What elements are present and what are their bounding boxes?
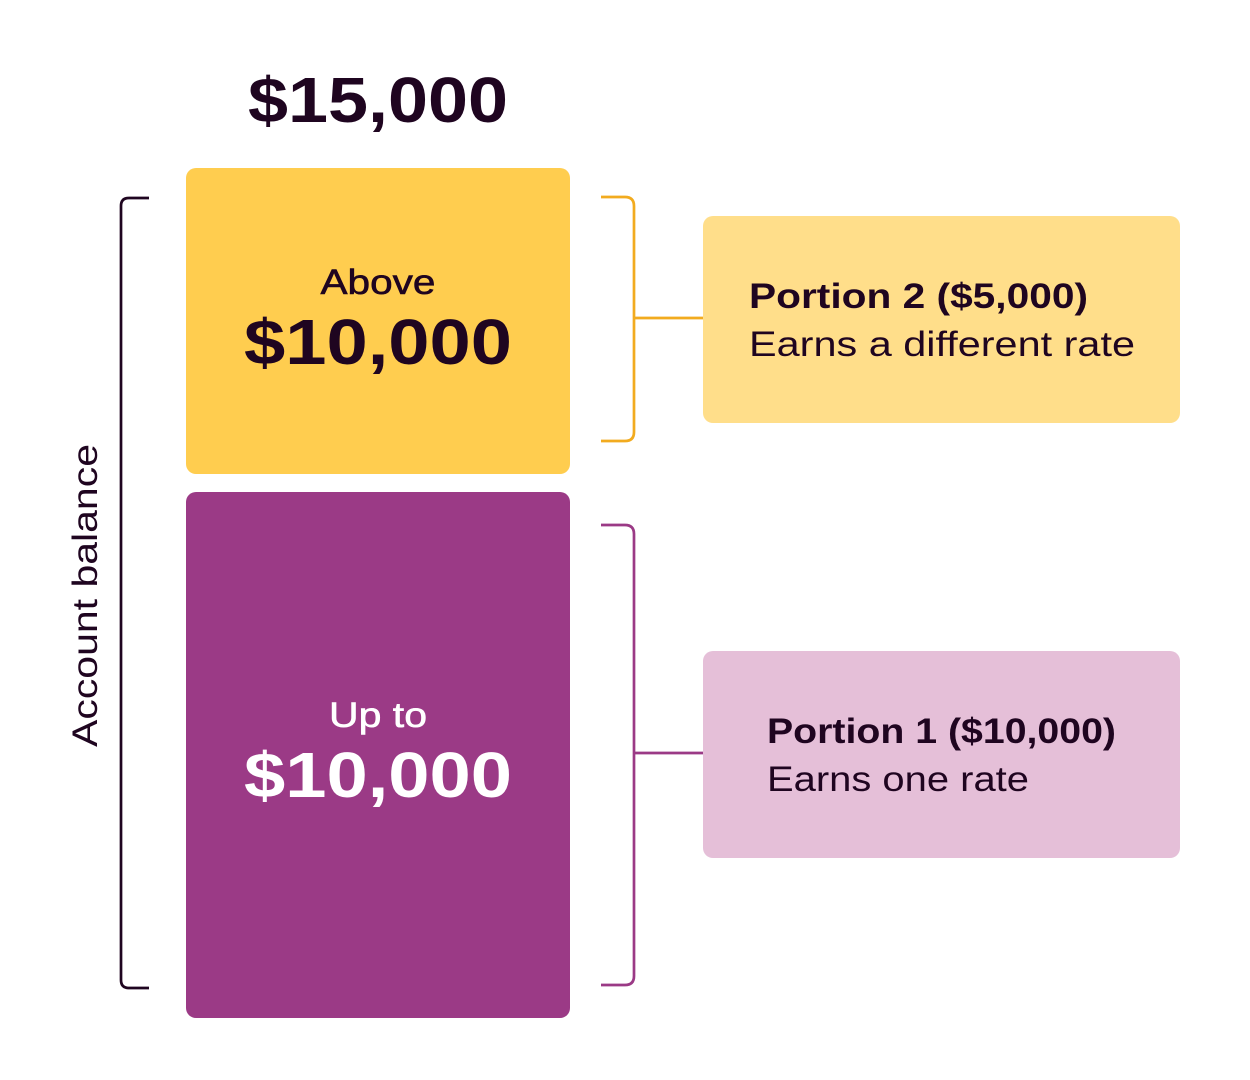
left bracket: account balance xyxy=(121,198,149,988)
callout text: portion 2: Earns a different rate xyxy=(749,325,1135,364)
callout text: portion 1: Earns one rate xyxy=(767,760,1029,799)
callout heading: portion 1: Portion 1 ($10,000) xyxy=(767,712,1116,751)
vertical label: account balance: Account balance xyxy=(66,444,105,747)
amount: above 10,000: $10,000 xyxy=(244,306,512,378)
panel: above 10,000 xyxy=(186,168,570,474)
callout: portion 2 xyxy=(703,216,1180,423)
amount: up to 10,000: $10,000 xyxy=(244,739,512,811)
callout heading: portion 2: Portion 2 ($5,000) xyxy=(749,277,1088,316)
callout: portion 1 xyxy=(703,651,1180,858)
panel: up to 10,000 xyxy=(186,492,570,1018)
title: total balance: $15,000 xyxy=(248,64,508,136)
label: up to: Up to xyxy=(329,696,427,735)
bracket: portion 1 connector xyxy=(601,525,703,985)
label: above: Above xyxy=(320,263,436,302)
bracket: portion 2 connector xyxy=(601,197,703,441)
